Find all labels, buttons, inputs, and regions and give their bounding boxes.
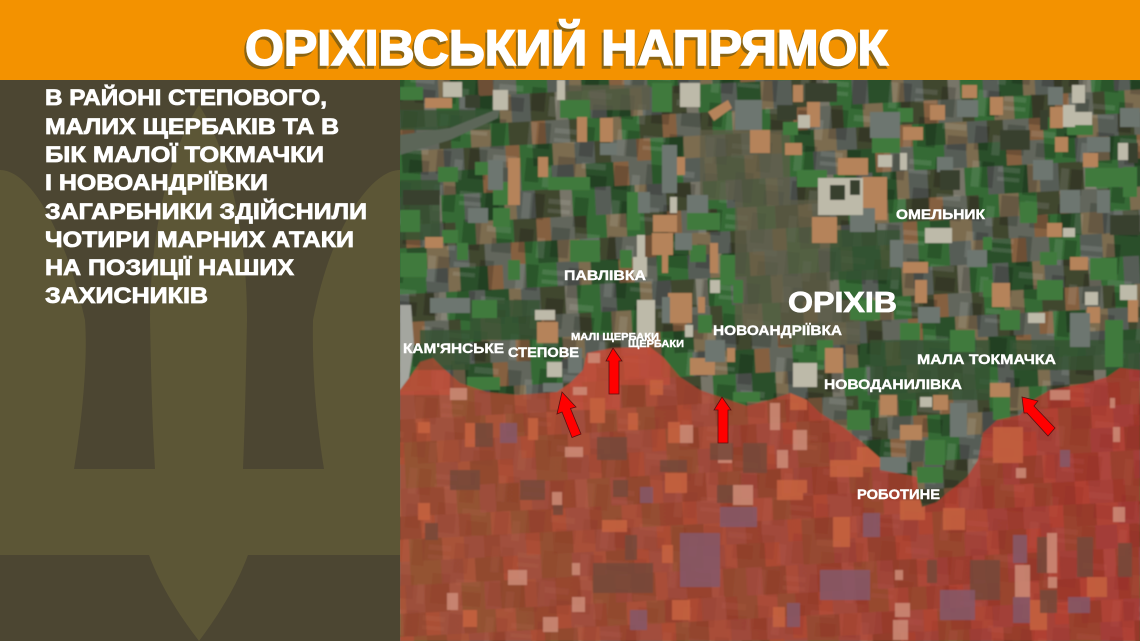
text block: report [45, 85, 367, 308]
fields: pale [443, 80, 1137, 407]
label: Shcherbaky: ЩЕРБАКИ [628, 338, 684, 350]
red-zone purple plots [500, 423, 1090, 630]
text block: report: НА ПОЗИЦІЇ НАШИХ [45, 255, 294, 280]
label: Pavlivka: ПАВЛІВКА [564, 267, 646, 283]
text block: report: ЗАХИСНИКІВ [45, 283, 208, 308]
river band [400, 108, 500, 155]
icon: trident watermark [0, 105, 400, 641]
label: Omelnyk: ОМЕЛЬНИК [896, 207, 986, 222]
lake [400, 305, 414, 390]
title: ОРІХІВСЬКИЙ НАПРЯМОК [245, 19, 888, 76]
label: Robotyne: РОБОТИНЕ [857, 486, 940, 502]
panel: satellite map [395, 75, 1140, 641]
label: Mali Shcherbaky: МАЛІ ЩЕРБАКИ [571, 331, 659, 343]
red-zone bright area [400, 345, 670, 410]
text block: report: МАЛИХ ЩЕРБАКІВ ТА В [45, 114, 339, 139]
label: Stepove: СТЕПОВЕ [508, 344, 579, 360]
text block: report: ЗАГАРБНИКИ ЗДІЙСНИЛИ [45, 199, 367, 224]
fields: dark plots [403, 83, 1140, 235]
fields: orange-brown [425, 85, 1138, 440]
red-zone pale plots [447, 353, 1125, 640]
panel: left sidebar background [0, 80, 400, 641]
text block: report: В РАЙОНІ СТЕПОВОГО, [45, 85, 327, 110]
label: Kamianske: КАМ'ЯНСЬКЕ [403, 340, 504, 356]
fields: green [400, 83, 1137, 483]
header band [0, 0, 1140, 80]
arrow: towards Mala Tokmachka [1022, 397, 1055, 436]
fields: grey [430, 87, 1140, 473]
text block: report: І НОВОАНДРІЇВКИ [45, 170, 268, 195]
label: Novodanylivka: НОВОДАНИЛІВКА [824, 376, 962, 392]
arrow: towards Novoandriivka [714, 397, 731, 443]
red-zone orange plots [418, 380, 1107, 630]
label: Mala Tokmachka: МАЛА ТОКМАЧКА [917, 351, 1056, 367]
text block: report: БІК МАЛОЇ ТОКМАЧКИ [45, 142, 324, 167]
town and scrub tones [560, 85, 860, 345]
arrow: towards Mali Shcherbaky [606, 348, 622, 394]
red-zone dark plots [425, 423, 1132, 613]
label: Orikhiv: ОРІХІВ [788, 287, 897, 319]
label: Novoandriivka: НОВОАНДРІЇВКА [713, 322, 842, 338]
arrow: towards Stepove [557, 392, 581, 438]
occupied territory: red overlay [400, 340, 1140, 641]
text block: report: ЧОТИРИ МАРНИХ АТАКИ [45, 227, 354, 252]
map labels [403, 207, 1056, 502]
